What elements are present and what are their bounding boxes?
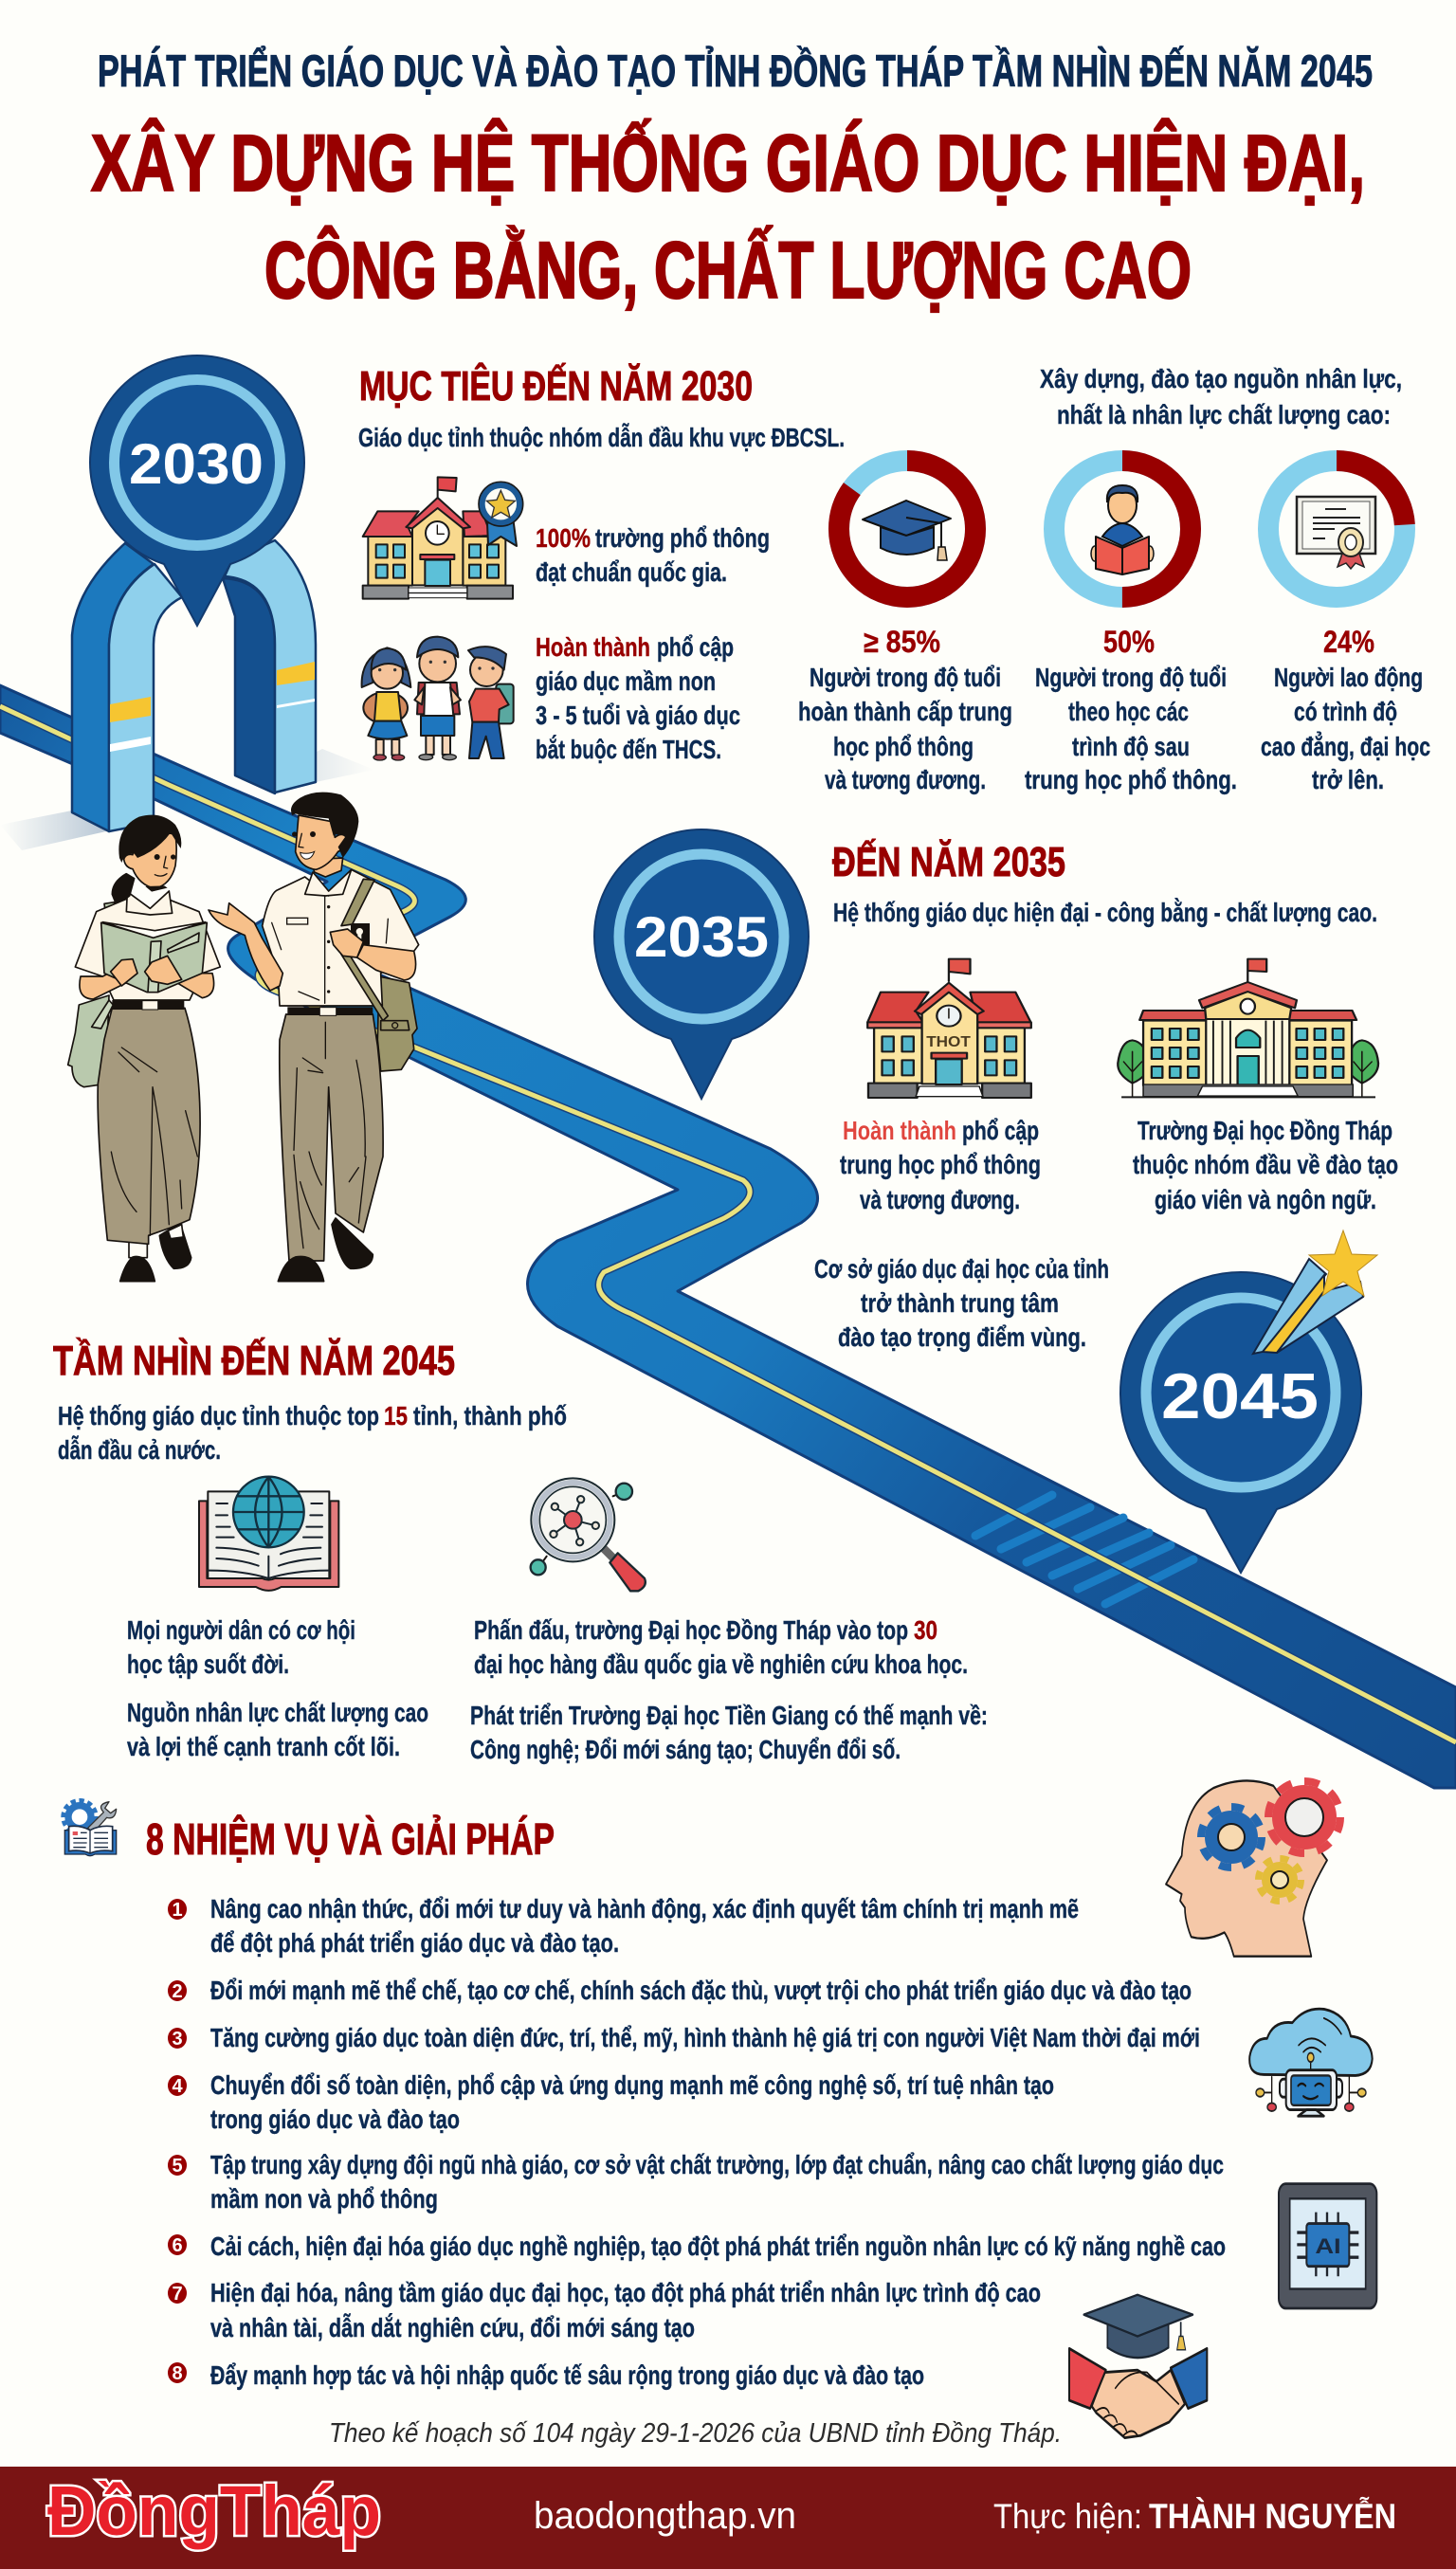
text: 85% caption: ≥ 85%: [864, 625, 940, 659]
text: Dong Thap University top 30: 30: [914, 1615, 937, 1645]
pin: 2030: 2030: [129, 432, 264, 496]
text: 24% caption: trở lên.: [1312, 765, 1384, 794]
icon: AI tablet: [1279, 2184, 1376, 2308]
footer: [0, 2467, 1456, 2569]
text: 100% schools: [536, 523, 770, 587]
credit: Thực hiện:: [993, 2497, 1142, 2536]
boy student: [209, 793, 419, 1282]
pin: 2045 with star: 2045: [1161, 1360, 1319, 1432]
text: Dong Thap University top 30: Phấn đấu, trường Đại học Đồng Tháp vào top: [474, 1615, 908, 1645]
intro 2045: 15: [384, 1401, 408, 1430]
text: high school completion: Hoàn thành: [843, 1116, 956, 1145]
pin: 2045 with star: [1120, 1230, 1377, 1573]
text: Dong Thap University: giáo viên và ngôn ngữ.: [1155, 1185, 1376, 1214]
text: high school completion: phổ cập: [962, 1116, 1039, 1145]
text: 85% caption: Người trong độ tuổi: [810, 663, 1001, 692]
text: high quality workforce: [127, 1698, 428, 1761]
donut: 85%: [839, 461, 975, 597]
donut: 50%: [1054, 461, 1191, 597]
panel: goals 2030: [358, 362, 845, 764]
text: 50% caption: trình độ sau: [1072, 732, 1190, 761]
heading: 2045: TẦM NHÌN ĐẾN NĂM 2045: [53, 1337, 455, 1384]
text: Dong Thap University: [1133, 1116, 1398, 1214]
text: universal education: giáo dục mầm non: [536, 666, 716, 696]
task 1: 1: [172, 1900, 183, 1921]
task 2: 2: [172, 1981, 183, 2002]
task 4: Chuyển đổi số toàn diện, phổ cập và ứng dụng mạnh mẽ công nghệ số, trí tuệ nhân tạo: [210, 2070, 1054, 2100]
text: Dong Thap University top 30: đại học hàng đầu quốc gia về nghiên cứu khoa học.: [474, 1649, 968, 1679]
task 1: để đột phá phát triển giáo dục và đào tạo.: [210, 1928, 619, 1958]
text: lifelong learning: Mọi người dân có cơ hội: [127, 1615, 355, 1645]
icon: school with badge: [363, 477, 523, 599]
task 8: 8: [172, 2363, 183, 2384]
task 8: Đẩy mạnh hợp tác và hội nhập quốc tế sâu rộng trong giáo dục và đào tạo: [210, 2360, 924, 2390]
panel: 8 tasks and solutions: [64, 1780, 1376, 2449]
task 7: Hiện đại hóa, nâng tầm giáo dục đại học, tạo đột phá phát triển nhân lực trình độ cao: [210, 2278, 1041, 2307]
text: 50% caption: Người trong độ tuổi: [1035, 663, 1227, 692]
text: 85% caption: hoàn thành cấp trung: [798, 697, 1012, 726]
text: 85% caption: và tương đương.: [825, 765, 986, 794]
task 7: 7: [172, 2284, 183, 2305]
pin: 2035: 2035: [634, 905, 769, 969]
text: Tien Giang University: Phát triển Trường Đại học Tiền Giang có thế mạnh về:: [470, 1701, 988, 1730]
text: high school completion: trung học phổ thông: [840, 1150, 1041, 1179]
panel: vision 2045: [53, 1337, 988, 1764]
task 6: 6: [172, 2235, 183, 2256]
text: lifelong learning: [127, 1615, 355, 1679]
intro 2045: tỉnh, thành phố: [413, 1401, 567, 1430]
task 3: 3: [172, 2029, 183, 2050]
text: universal education: bắt buộc đến THCS.: [536, 735, 721, 764]
pin: 2035: [594, 829, 809, 1099]
logo: Dong Thap: ĐồngTháp: [47, 2471, 381, 2550]
text: key training centre: Cơ sở giáo dục đại học của tỉnh: [814, 1254, 1109, 1284]
task 4: [168, 2070, 1054, 2134]
text: universal education: Hoàn thành: [536, 632, 650, 662]
text: 50% caption: [1025, 625, 1237, 794]
arch: [72, 540, 316, 831]
intro 2045: [58, 1401, 567, 1465]
text: Tien Giang University: Công nghệ; Đổi mới sáng tạo; Chuyển đổi số.: [470, 1735, 901, 1764]
heading: 8 tasks: 8 NHIỆM VỤ VÀ GIẢI PHÁP: [146, 1814, 555, 1864]
credit: [993, 2496, 1396, 2536]
credit: THÀNH NGUYỄN: [1149, 2496, 1396, 2536]
text: lifelong learning: học tập suốt đời.: [127, 1649, 289, 1679]
task 1: Nâng cao nhận thức, đổi mới tư duy và hành động, xác định quyết tâm chính trị mạnh mẽ: [210, 1894, 1079, 1923]
text: 100% schools: đạt chuẩn quốc gia.: [536, 557, 727, 587]
icon: high school: [867, 959, 1031, 1098]
heading: 2030: MỤC TIÊU ĐẾN NĂM 2030: [359, 362, 753, 410]
donut: 24%: [1268, 461, 1405, 597]
road: [0, 685, 1456, 1788]
icon: book, gear and wrench: [64, 1800, 117, 1856]
text: key training centre: trở thành trung tâm: [861, 1288, 1059, 1318]
title block: [91, 46, 1373, 315]
icon: university: [1118, 959, 1378, 1097]
text: key training centre: đào tạo trọng điểm vùng.: [838, 1322, 1086, 1352]
task 1: [168, 1894, 1079, 1958]
task 7: và nhân tài, dẫn dắt nghiên cứu, đổi mới sáng tạo: [210, 2313, 695, 2342]
website: baodongthap.vn: [534, 2495, 796, 2537]
task 5: [168, 2150, 1224, 2214]
task 5: mầm non và phổ thông: [210, 2184, 438, 2214]
text: 50% caption: 50%: [1103, 625, 1155, 659]
text: universal education: 3 - 5 tuổi và giáo dục: [536, 701, 740, 730]
icon: high school: THOT: [926, 1034, 971, 1050]
icon: AI tablet: AI: [1315, 2235, 1341, 2259]
icon: magnifier: [531, 1478, 646, 1591]
task 7: [168, 2278, 1041, 2342]
task 4: trong giáo dục và đào tạo: [210, 2104, 460, 2134]
text: workforce heading: [1040, 364, 1402, 429]
icon: book and globe: [199, 1477, 338, 1591]
students: [68, 793, 419, 1282]
task 5: 5: [172, 2156, 183, 2177]
icon: head with gears: [1166, 1780, 1340, 1957]
heading: 2035: ĐẾN NĂM 2035: [832, 838, 1065, 885]
intro 2030: Giáo dục tỉnh thuộc nhóm dẫn đầu khu vực ĐBCSL.: [358, 423, 845, 452]
text: Tien Giang University: [470, 1701, 988, 1764]
pin: 2030: [90, 355, 304, 626]
source note: Theo kế hoạch số 104 ngày 29-1-2026 của UBND tỉnh Đồng Tháp.: [329, 2418, 1062, 2449]
icon: graduation cap and handshake: [1069, 2295, 1207, 2438]
text: universal education: [536, 632, 740, 764]
text: 100% schools: 100%: [536, 523, 591, 553]
text: 50% caption: theo học các: [1068, 697, 1189, 726]
panel: workforce donuts: [798, 364, 1430, 794]
text: high school completion: và tương đương.: [860, 1185, 1020, 1214]
text: Dong Thap University top 30: [474, 1615, 968, 1679]
girl student: [68, 815, 220, 1282]
text: 85% caption: học phổ thông: [833, 732, 974, 761]
text: 50% caption: trung học phổ thông.: [1025, 765, 1237, 794]
icon: cloud robot: [1249, 2009, 1373, 2116]
shadows under arch: [0, 749, 374, 850]
text: 100% schools: trường phổ thông: [595, 523, 770, 553]
task 4: 4: [172, 2076, 183, 2097]
text: key training centre: [814, 1254, 1109, 1352]
intro 2045: dẫn đầu cả nước.: [58, 1435, 221, 1465]
text: 24% caption: có trình độ: [1294, 697, 1397, 726]
text: 85% caption: [798, 625, 1012, 794]
icon: three children: [362, 637, 514, 760]
panel: goals 2035: [814, 838, 1398, 1352]
text: high school completion: [840, 1116, 1041, 1214]
text: 24% caption: [1261, 625, 1430, 794]
text: high quality workforce: và lợi thế cạnh tranh cốt lõi.: [127, 1732, 400, 1761]
text: high quality workforce: Nguồn nhân lực chất lượng cao: [127, 1698, 428, 1727]
intro 2045: Hệ thống giáo dục tỉnh thuộc top: [58, 1401, 379, 1430]
text: universal education: phổ cập: [657, 632, 734, 662]
text: 24% caption: 24%: [1323, 625, 1374, 659]
